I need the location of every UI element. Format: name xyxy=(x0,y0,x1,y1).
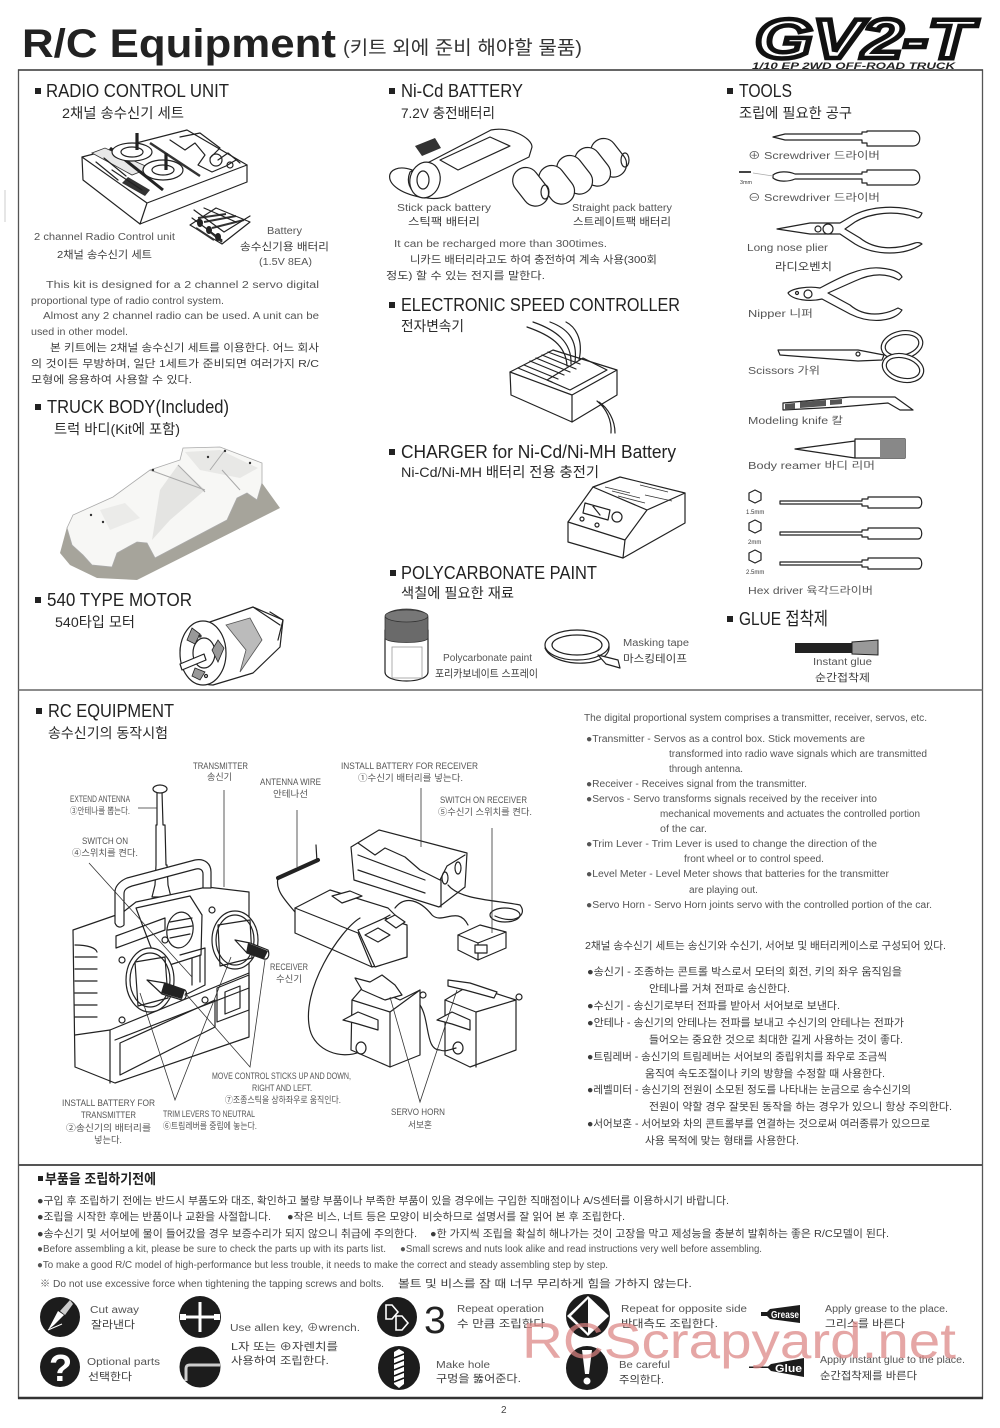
heading: Ni-Cd battery xyxy=(389,81,523,121)
text block: english explanation: ●Transmitter - Servos as a control box. Stick movements are xyxy=(586,734,865,745)
icon: scissors: Scissors 가위 xyxy=(748,364,820,377)
panel: before assembly notes xyxy=(37,1171,965,1390)
text block: korean explanation: 2채널 송수신기 세트는 송신기와 수신기, 서어보 및 배터리케이스로 구성되어 있다. xyxy=(585,940,946,952)
heading: radio control unit: 2채널 송수신기 세트 xyxy=(62,105,184,121)
text block: assembly notes: 볼트 및 비스를 잠 때 너무 무리하게 힘을 가하지 않는다. xyxy=(398,1277,692,1290)
watermark: RCScrapyard.net xyxy=(522,1313,956,1369)
heading: polycarbonate paint xyxy=(390,563,597,601)
heading: RC equipment: RC EQUIPMENT xyxy=(48,701,174,721)
labels: equipment diagram: 송신기 xyxy=(207,772,232,782)
text block: assembly notes: ●작은 비스, 너트 등은 모양이 비슷하므로 설명서를 잘 읽어 본 후 조립한다. xyxy=(287,1210,625,1223)
heading: tools: TOOLS xyxy=(739,81,792,101)
heading: polycarbonate paint: POLYCARBONATE PAINT xyxy=(401,563,597,583)
text block: korean explanation: ●송신기 - 조종하는 콘트롤 박스로서 모터의 회전, 키의 좌우 움직임을 xyxy=(587,965,902,978)
labels: equipment diagram: ④스위치를 켠다. xyxy=(72,847,138,858)
caption: radio: Battery xyxy=(267,226,302,237)
heading: tools: 조립에 필요한 공구 xyxy=(739,105,852,121)
labels: equipment diagram: ⑦조종스틱을 상하좌우로 움직인다. xyxy=(225,1094,341,1105)
labels: equipment diagram: INSTALL BATTERY FOR xyxy=(62,1098,155,1108)
heading: charger: Ni-Cd/Ni-MH 배터리 전용 충전기 xyxy=(401,464,599,480)
icon: make hole xyxy=(378,1346,521,1390)
text block: battery description: 니카드 배터리라고도 하여 충전하여 계속 사용(300회 xyxy=(410,253,657,266)
text block: english explanation: The digital proportional system comprises a transmitter, receiver, servos, etc. xyxy=(584,713,927,724)
labels: equipment diagram: RECEIVER xyxy=(270,962,308,972)
icon: optional parts xyxy=(40,1347,160,1390)
icon: charger xyxy=(568,477,685,558)
text block: english explanation: ●Servo Horn - Servo Horn joints servo with the controlled portion of the car. xyxy=(586,900,932,911)
text block: korean explanation: 사용 목적에 맞는 형태를 사용한다. xyxy=(645,1135,799,1147)
labels: equipment diagram: RIGHT AND LEFT. xyxy=(252,1083,312,1093)
icon: hex drivers: Hex driver 육각드라이버 xyxy=(748,585,873,597)
icon: glue: Glue xyxy=(775,1363,802,1375)
text block: assembly notes: ●To make a good R/C model of high-performance but less trouble, it needs to make the correct and steady assembling step by step. xyxy=(37,1260,608,1271)
captions: paint and tape: 포리카보네이트 스프레이 xyxy=(435,668,538,680)
caption: radio xyxy=(34,226,329,268)
illustration: receiver, battery holder and servos xyxy=(277,830,522,1067)
text block: radio description: proportional type of radio control system. xyxy=(31,296,224,307)
heading: truck body xyxy=(35,397,229,437)
text block: english explanation: ●Servos - Servo transforms signals received by the receiver into xyxy=(586,794,877,805)
icon: speed controller xyxy=(510,322,617,433)
text block: assembly notes xyxy=(37,1194,889,1290)
text block: korean explanation: ●안테나 - 송신기의 안테나는 전파를 보내고 수신기의 안테나는 전파가 xyxy=(587,1017,904,1029)
labels: equipment diagram: SERVO HORN xyxy=(391,1107,445,1117)
heading: electronic speed controller: ELECTRONIC SPEED CONTROLLER xyxy=(401,295,680,315)
icon: hex drivers: 1.5mm xyxy=(746,510,764,516)
icon: cut away xyxy=(40,1297,139,1337)
text block: battery description: It can be recharged more than 300times. xyxy=(394,239,607,250)
icon: repeat opposite side xyxy=(566,1294,748,1338)
icon: grease: Grease xyxy=(771,1310,799,1321)
labels: equipment diagram: 수신기 xyxy=(276,974,302,984)
icon: plus screwdriver: ⊕ Screwdriver 드라이버 xyxy=(748,150,880,162)
heading: 540 motor: 540 TYPE MOTOR xyxy=(47,590,192,610)
icon: optional parts: Optional parts xyxy=(87,1357,160,1368)
panel: charger xyxy=(389,442,685,558)
page number: 2 xyxy=(501,1405,507,1416)
icon: stick pack battery xyxy=(390,129,532,201)
text block: battery description: 정도) 할 수 있는 전지를 말한다. xyxy=(386,270,545,282)
heading: before assembly: 부품을 조립하기전에 xyxy=(45,1171,156,1187)
icon: motor xyxy=(180,607,283,685)
icon: grease: Apply grease to the place. xyxy=(825,1304,948,1315)
icon: cut away: 잘라낸다 xyxy=(91,1319,135,1331)
icon: body reamer: Body reamer 바디 리머 xyxy=(748,460,875,472)
icon: hex drivers: 2mm xyxy=(748,540,761,546)
leader lines xyxy=(89,788,492,1102)
text block: assembly notes: ●Small screws and nuts look alike and read instructions very well before assembling. xyxy=(400,1244,762,1255)
captions: battery types: Stick pack battery xyxy=(397,203,491,214)
text block: english explanation: ●Level Meter - Level Meter shows that batteries for the transmitter xyxy=(586,869,890,880)
heading: Ni-Cd battery: 7.2V 충전배터리 xyxy=(401,105,495,121)
icon: long nose plier: 라디오벤치 xyxy=(775,261,832,273)
panel: truck body xyxy=(35,397,280,580)
icon: hex drivers: 2.5mm xyxy=(746,570,764,576)
text block: korean explanation: ●서어보혼 - 서어보와 차의 콘트롤부를 연결하는 것으로써 여러종류가 있으므로 xyxy=(587,1117,930,1130)
icon: glue xyxy=(749,1355,965,1382)
icon: modeling knife xyxy=(748,397,913,427)
icon: scissors xyxy=(748,327,927,387)
captions: battery types: 스트레이트팩 배터리 xyxy=(573,216,671,228)
icon: masking tape xyxy=(545,630,620,668)
heading: charger xyxy=(389,442,676,480)
heading: Ni-Cd battery: Ni-Cd BATTERY xyxy=(401,81,523,101)
text block: korean explanation: ●트림레버 - 송신기의 트림레버는 서어보의 중립위치를 좌우로 조금씩 xyxy=(587,1050,887,1063)
captions: battery types: 스틱팩 배터리 xyxy=(408,216,480,228)
heading: truck body: TRUCK BODY(Included) xyxy=(47,397,229,417)
labels: equipment diagram: ③안테나를 뽑는다. xyxy=(70,806,130,816)
labels: equipment diagram: MOVE CONTROL STICKS UP AND DOWN, xyxy=(212,1071,351,1081)
text block: english explanation: ●Receiver - Receives signal from the transmitter. xyxy=(586,779,807,790)
icon: hex drivers xyxy=(746,490,922,597)
labels: equipment diagram: ②송신기의 배터리를 xyxy=(66,1123,151,1133)
captions: battery types xyxy=(397,203,672,228)
text block: radio description xyxy=(31,280,320,386)
icon: repeat operation: Repeat operation xyxy=(457,1304,544,1315)
text block: radio description: used in other model. xyxy=(31,327,128,338)
icon: repeat operation: 3 xyxy=(424,1300,446,1342)
icon: be careful xyxy=(566,1346,670,1390)
heading: 540 motor xyxy=(35,590,192,630)
heading: radio control unit: RADIO CONTROL UNIT xyxy=(46,81,229,101)
captions: paint and tape: 마스킹테이프 xyxy=(623,653,687,665)
icon: be careful: Be careful xyxy=(619,1360,670,1371)
logo: GV2-T: 1/10 EP 2WD OFF-ROAD TRUCK xyxy=(752,61,957,72)
icon: make hole: 구멍을 뚫어준다. xyxy=(436,1373,521,1385)
text block: korean explanation: ●수신기 - 송신기로부터 전파를 받아서 서어보로 보낸다. xyxy=(587,1000,840,1012)
labels: equipment diagram xyxy=(62,761,532,1145)
icon: radio control box xyxy=(82,130,247,224)
labels: equipment diagram: TRANSMITTER xyxy=(81,1110,136,1120)
text block: radio description: 모형에 응용하여 사용할 수 있다. xyxy=(31,373,192,386)
caption: radio: 2 channel Radio Control unit xyxy=(34,232,175,243)
labels: equipment diagram: TRANSMITTER xyxy=(193,761,248,771)
heading: charger: CHARGER for Ni-Cd/Ni-MH Battery xyxy=(401,442,676,462)
icon: minus screwdriver: 3mm xyxy=(740,180,752,186)
labels: equipment diagram: 넣는다. xyxy=(94,1135,122,1145)
icon: long nose plier xyxy=(747,207,922,273)
text block: english explanation: ●Trim Lever - Trim Lever is used to change the direction of the xyxy=(586,839,877,850)
labels: equipment diagram: 서보혼 xyxy=(408,1119,432,1130)
icon: optional parts: ? xyxy=(49,1348,72,1390)
panel: glue xyxy=(727,609,878,684)
text block: english explanation: through antenna. xyxy=(669,764,743,775)
text block: korean explanation: 전원이 약할 경우 잘못된 동작을 하는 경우가 있으니 항상 주의한다. xyxy=(649,1100,952,1113)
icon: glue: 순간접착제를 바른다 xyxy=(820,1370,917,1382)
text block: assembly notes: ●한 가지씩 조립을 확실히 해나가는 것이 고장을 막고 제성능을 충분히 발휘하는 좋은 R/C모델이 된다. xyxy=(430,1227,889,1240)
labels: equipment diagram: SWITCH ON RECEIVER xyxy=(440,795,527,805)
text block: korean explanation: 들어오는 중요한 것으로 최대한 길게 사용하는 것이 좋다. xyxy=(649,1033,903,1046)
icon: nipper xyxy=(748,268,902,320)
icon: long nose plier: Long nose plier xyxy=(747,243,829,254)
labels: equipment diagram: ANTENNA WIRE xyxy=(260,777,321,787)
icon: allen key and wrench: Use allen key, ⊕wrench. xyxy=(230,1323,360,1334)
labels: equipment diagram: SWITCH ON xyxy=(82,836,128,846)
text block: korean explanation xyxy=(585,940,952,1147)
text block: english explanation: of the car. xyxy=(660,824,707,835)
text block: assembly notes: ●구입 후 조립하기 전에는 반드시 부품도와 대조, 확인하고 불량 부품이나 부족한 부품이 있을 경우에는 구입한 직매점이나 A/S센터를 이용하시기 바랍니다. xyxy=(37,1194,729,1207)
heading: RC equipment: 송수신기의 동작시험 xyxy=(48,725,168,741)
panel: electronic speed controller xyxy=(389,295,680,433)
heading: electronic speed controller xyxy=(389,295,680,334)
icon: straight pack battery xyxy=(507,133,632,211)
text block: radio description: 본 키트에는 2채널 송수신기 세트를 이용한다. 어느 회사 xyxy=(50,342,319,354)
text block: radio description: This kit is designed for a 2 channel 2 servo digital xyxy=(46,280,319,291)
labels: equipment diagram: 안테나선 xyxy=(273,789,308,799)
panel: radio control unit xyxy=(31,81,329,386)
icon: minus screwdriver xyxy=(739,170,920,204)
icon: grease xyxy=(761,1304,948,1330)
icon: be careful: 주의한다. xyxy=(619,1374,664,1386)
icon: nipper: Nipper 니퍼 xyxy=(748,308,813,320)
heading: polycarbonate paint: 색칠에 필요한 재료 xyxy=(401,585,514,601)
heading: 540 motor: 540타입 모터 xyxy=(55,614,135,630)
icon: glue tube: Instant glue xyxy=(813,657,872,668)
labels: equipment diagram: INSTALL BATTERY FOR RECEIVER xyxy=(341,761,478,771)
title: (키트 외에 준비 해야할 물품) xyxy=(343,37,582,59)
text block: assembly notes: ●송수신기 및 서어보에 물이 들어갔을 경우 보증수리가 되지 않으니 취급에 주의한다. xyxy=(37,1227,417,1240)
text block: battery description xyxy=(386,239,657,282)
title: R/C Equipment xyxy=(22,22,336,66)
labels: equipment diagram: EXTEND ANTENNA xyxy=(70,794,130,804)
icon: grease: 그리스를 바른다 xyxy=(825,1318,905,1330)
text block: english explanation: front wheel or to control speed. xyxy=(684,854,824,865)
text block: english explanation: are playing out. xyxy=(689,885,758,896)
illustration: truck body xyxy=(60,447,280,580)
labels: equipment diagram: ⑤수신기 스위치를 켠다. xyxy=(438,806,532,817)
title xyxy=(22,22,582,66)
panel: polycarbonate paint xyxy=(385,563,689,681)
icon: glue tube: 순간접착제 xyxy=(815,672,870,684)
icon: repeat operation: 수 만큼 조립한다 xyxy=(457,1317,545,1330)
icon: AA batteries xyxy=(190,208,250,244)
panel: 540 motor xyxy=(35,590,283,685)
panel: RC equipment xyxy=(36,701,952,1147)
text block: radio description: 의 것이든 무방하며, 일단 1세트가 준비되면 여러가지 R/C xyxy=(31,357,319,370)
icon: repeat operation xyxy=(377,1297,545,1342)
heading: electronic speed controller: 전자변속기 xyxy=(401,318,464,334)
icon: glue: Apply instant glue to the place. xyxy=(820,1355,965,1366)
captions: paint and tape: Polycarbonate paint xyxy=(443,653,532,664)
icon: allen key and wrench: 사용하여 조립한다. xyxy=(231,1354,329,1367)
text block: english explanation xyxy=(584,713,932,911)
icon: allen key and wrench xyxy=(179,1296,360,1388)
labels: equipment diagram: ⑥트림레버를 중립에 놓는다. xyxy=(163,1120,257,1131)
text block: assembly notes: ●조립을 시작한 후에는 반품이나 교환을 사절합니다. xyxy=(37,1210,271,1223)
panel: tools xyxy=(727,81,927,597)
heading: truck body: 트럭 바디(Kit에 포함) xyxy=(54,421,180,437)
text block: assembly notes: ●Before assembling a kit, please be sure to check the parts up with its parts list. xyxy=(37,1244,386,1255)
icon: make hole: Make hole xyxy=(436,1360,491,1371)
icon: minus screwdriver: ⊖ Screwdriver 드라이버 xyxy=(748,192,880,204)
text block: korean explanation: 움직여 속도조절이나 키의 방향을 수정할 때 사용한다. xyxy=(645,1067,885,1080)
text block: english explanation: mechanical movements and actuates the controlled portion xyxy=(660,809,920,820)
caption: radio: (1.5V 8EA) xyxy=(259,257,312,268)
text block: korean explanation: ●레벨미터 - 송신기의 전원이 소모된 정도를 나타내는 눈금으로 송수신기의 xyxy=(587,1084,911,1096)
caption: radio: 2채널 송수신기 세트 xyxy=(57,249,152,261)
caption: radio: 송수신기용 배터리 xyxy=(240,241,329,253)
heading: RC equipment xyxy=(36,701,174,741)
captions: battery types: Straight pack battery xyxy=(572,203,672,214)
heading: tools xyxy=(727,81,852,121)
labels: equipment diagram: ①수신기 배터리를 넣는다. xyxy=(358,773,463,783)
labels: equipment diagram: TRIM LEVERS TO NEUTRAL xyxy=(163,1109,255,1119)
logo: GV2-T: GV2-T xyxy=(755,7,979,70)
text block: english explanation: transformed into radio wave signals which are transmitted xyxy=(669,749,927,760)
text block: korean explanation: 안테나를 거쳐 전파로 송신한다. xyxy=(649,983,790,995)
icon: modeling knife: Modeling knife 칼 xyxy=(748,414,843,427)
panel: Ni-Cd battery xyxy=(386,81,672,282)
text block: radio description: Almost any 2 channel radio can be used. A unit can be xyxy=(43,311,320,322)
captions: paint and tape: Masking tape xyxy=(623,638,689,649)
icon: allen key and wrench: L자 또는 ⊕자렌치를 xyxy=(231,1341,338,1353)
text block: assembly notes: ※ Do not use excessive force when tightening the tapping screws and bolts. xyxy=(40,1279,384,1290)
icon: repeat opposite side: Repeat for opposite side xyxy=(621,1304,748,1315)
icon: glue tube xyxy=(795,640,878,684)
icon: optional parts: 선택한다 xyxy=(88,1371,132,1383)
icon: plus screwdriver xyxy=(748,131,920,162)
illustration: transmitter xyxy=(73,785,269,1083)
heading: glue: GLUE 접착제 xyxy=(739,609,828,629)
captions: paint and tape xyxy=(435,638,689,680)
icon: repeat opposite side: 반대측도 조립한다. xyxy=(621,1317,718,1330)
icon: body reamer xyxy=(748,439,905,472)
heading: radio control unit xyxy=(35,81,229,121)
icon: cut away: Cut away xyxy=(90,1305,139,1316)
icon: spray can xyxy=(385,609,428,681)
